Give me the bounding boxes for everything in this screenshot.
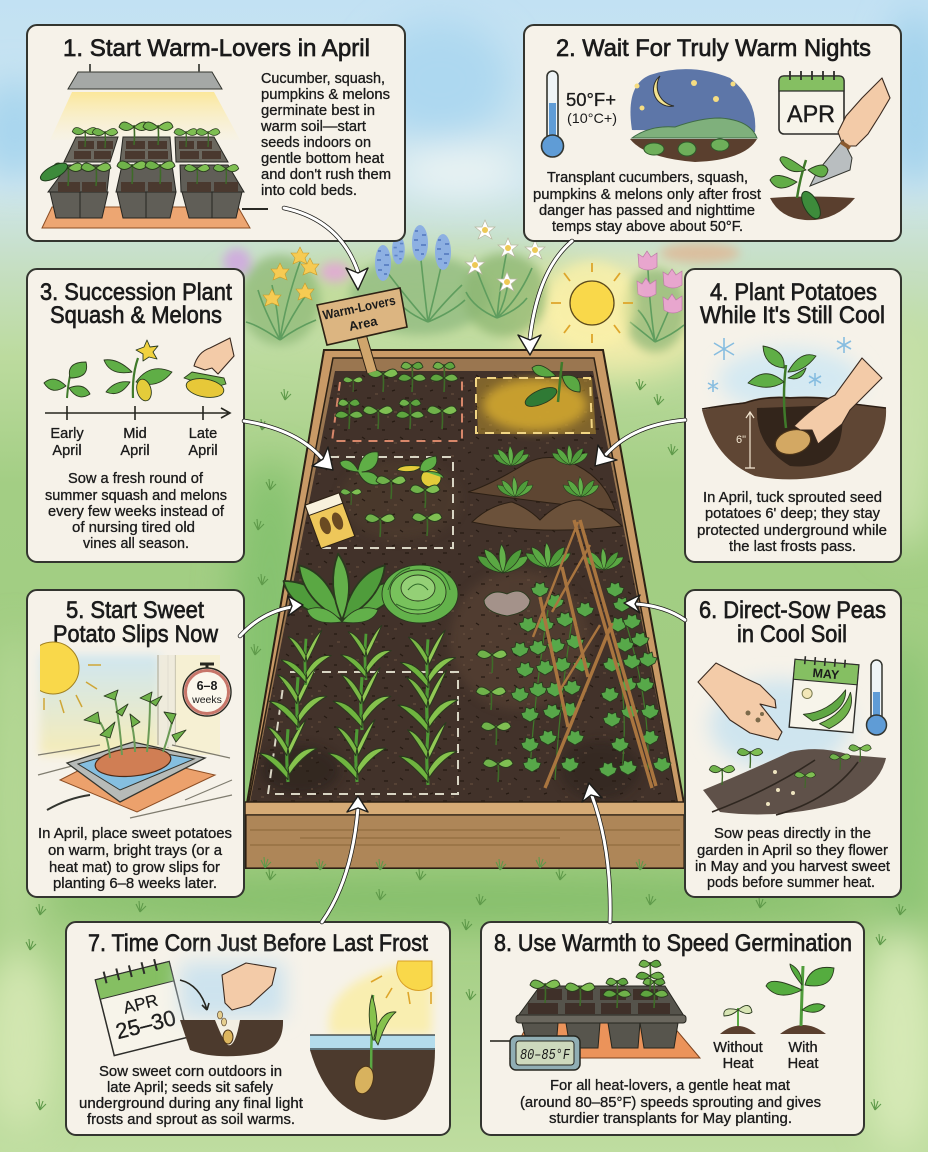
- arrow 1: panel 1 to warm-lovers area: [284, 208, 368, 290]
- body text 8: sturdier transplants for May planting.: [549, 1111, 792, 1127]
- heading 5: [53, 597, 218, 648]
- body text 6: [695, 826, 890, 891]
- icon: calendar Apr 25-30: APR: [121, 991, 160, 1018]
- sign: warm-lovers area: Warm-Lovers: [321, 293, 397, 323]
- icon: May calendar: MAY: [812, 666, 840, 682]
- heading 7: 7. Time Corn Just Before Last Frost: [88, 930, 428, 957]
- panel 6: direct-sow peas: [685, 590, 901, 897]
- illustration: sowing corn into soil: [180, 962, 285, 1056]
- arrow 2: panel 2 to warm bed corner: [518, 241, 572, 355]
- body text 7: late April; seeds sit safely: [107, 1080, 274, 1096]
- timeline labels: April: [188, 443, 218, 459]
- comparison labels: With: [788, 1040, 818, 1056]
- body text 5: In April, place sweet potatoes: [38, 826, 232, 842]
- late April squash in hand: [194, 338, 234, 374]
- sprout without heat: [720, 1005, 756, 1034]
- timeline labels: April: [120, 443, 150, 459]
- grow light: [50, 64, 240, 140]
- mid April plant: [133, 358, 138, 398]
- sign: warm-lovers area: [317, 288, 407, 372]
- body text 1: germinate best in: [261, 103, 375, 119]
- panel 4: plant potatoes: [685, 269, 901, 562]
- body text 8: [520, 1078, 821, 1127]
- digital thermometer: 80–85°F: [520, 1047, 571, 1064]
- body text 8: (around 80–85°F) speeds sprouting and gives: [520, 1095, 821, 1111]
- grass tufts: [26, 379, 906, 1110]
- illustration: planting a seed potato: [702, 346, 886, 479]
- body text 3: of nursing tired old: [72, 520, 195, 536]
- icon: thermometer: [866, 660, 886, 735]
- illustration: soil rows with sprouts: [703, 745, 886, 815]
- heading 2: 2. Wait For Truly Warm Nights: [556, 35, 871, 62]
- arrow 5: panel 5 to greens: [240, 596, 303, 636]
- illustration: hand dropping seeds: [698, 663, 782, 740]
- seedling trays: [38, 122, 244, 218]
- panel 5: start sweet potato slips: [27, 590, 244, 897]
- icon: timer 6-8 weeks: [183, 664, 231, 716]
- heading 6: in Cool Soil: [737, 621, 847, 648]
- temperature label: (10°C+): [567, 110, 617, 126]
- body text 2: pumpkins & melons only after frost: [533, 187, 761, 203]
- zone: succession squash and melons: [340, 452, 444, 537]
- timeline labels: April: [52, 443, 82, 459]
- zone: leafy greens: [284, 542, 624, 623]
- body text 1: and don't rush them: [261, 167, 391, 183]
- raised garden bed: [245, 350, 686, 870]
- dashed planting zones: [268, 378, 592, 794]
- comparison labels: [713, 1040, 818, 1072]
- panel 8: warmth for germination: [481, 922, 864, 1135]
- body text 3: vines all season.: [83, 536, 189, 552]
- arrow 8: panel 8 to trellis: [582, 783, 610, 922]
- illustration: window with sweet potato tray: [27, 642, 232, 818]
- comparison labels: Heat: [788, 1056, 818, 1072]
- body text 2: temps stay above about 50°F.: [552, 219, 743, 235]
- body text 8: For all heat-lovers, a gentle heat mat: [550, 1078, 790, 1094]
- icon: April calendar: APR: [787, 101, 835, 128]
- temperature label: 50°F+: [566, 89, 616, 110]
- sun over the bed: [548, 261, 636, 349]
- body text 2: danger has passed and nighttime: [539, 203, 755, 219]
- icon: May calendar: [789, 655, 859, 733]
- body text 1: [260, 71, 391, 199]
- body text 6: garden in April so they flower: [697, 843, 888, 859]
- icon: April calendar: [779, 71, 844, 134]
- zone: small pea seedlings: [476, 650, 513, 782]
- body text 5: planting 6–8 weeks later.: [53, 876, 217, 892]
- sky haze: [710, 680, 850, 770]
- body text 1: seeds indoors on: [261, 135, 371, 151]
- comparison labels: Without: [713, 1040, 763, 1056]
- arrow 3: panel 3 to squash zone: [244, 421, 333, 470]
- night scene: [630, 69, 757, 162]
- body text 6: Sow peas directly in the: [714, 826, 871, 842]
- body text 1: gentle bottom heat: [261, 151, 384, 167]
- heading 4: [700, 279, 885, 329]
- body text 6: pods before summer heat.: [707, 875, 875, 891]
- body text 4: In April, tuck sprouted seed: [703, 490, 882, 506]
- body text 3: every few weeks instead of: [48, 504, 225, 520]
- heading 6: [699, 597, 886, 648]
- heat mat: [510, 1020, 700, 1058]
- illustration: hand with trowel and plant: [770, 78, 890, 222]
- body text 6: in May and you harvest sweet: [695, 859, 890, 875]
- body text 5: on warm, bright trays (or a: [48, 843, 223, 859]
- body text 2: [533, 170, 761, 235]
- icon: timer 6-8 weeks: 6–8: [197, 679, 217, 693]
- arrow 7: panel 7 to corn: [322, 796, 368, 922]
- body text 4: protected underground while: [697, 523, 887, 539]
- heading 5: 5. Start Sweet: [66, 597, 204, 624]
- body text 3: summer squash and melons: [45, 488, 227, 504]
- timeline labels: Mid: [123, 426, 147, 442]
- body text 7: [79, 1064, 303, 1128]
- body text 3: Sow a fresh round of: [68, 471, 204, 487]
- zone: potato mounds: [468, 445, 622, 530]
- body text 7: Sow sweet corn outdoors in: [99, 1064, 282, 1080]
- timeline labels: [50, 426, 218, 459]
- icon: calendar Apr 25-30: 25–30: [113, 1005, 178, 1044]
- heading 4: While It's Still Cool: [700, 302, 885, 329]
- illustration: sun and sprouting corn: [310, 961, 435, 1120]
- early April plant: [67, 376, 70, 398]
- seedling tray: [516, 960, 686, 1048]
- panel 7: time corn: [66, 922, 450, 1135]
- sprout with heat: [766, 964, 834, 1034]
- illustration: planting a seed potato: 6": [736, 434, 746, 446]
- zone: warm-lovers seedlings: [335, 362, 458, 429]
- body text 7: underground during any final light: [79, 1096, 303, 1112]
- icon: timer 6-8 weeks: weeks: [191, 694, 222, 706]
- zone: transplanted cucumber: [523, 362, 580, 410]
- flower garden: [223, 220, 740, 352]
- heading 3: 3. Succession Plant: [40, 279, 232, 306]
- heading 5: Potato Slips Now: [53, 621, 218, 648]
- body text 7: frosts and sprout as soil warms.: [87, 1112, 295, 1128]
- zone: pea trellis with vines: [511, 520, 671, 788]
- body text 1: pumpkins & melons: [261, 87, 390, 103]
- heading 1: 1. Start Warm-Lovers in April: [63, 35, 370, 62]
- heading 3: Squash & Melons: [50, 302, 222, 329]
- body text 3: [45, 471, 227, 552]
- arrow 4: panel 4 to potato mounds: [595, 420, 685, 466]
- body text 1: warm soil—start: [260, 119, 366, 135]
- timeline labels: Early: [50, 426, 84, 442]
- icon: thermometer: [542, 71, 564, 157]
- panel 1: start warm-lovers in April: [27, 25, 405, 241]
- panel 2: wait for truly warm nights: [524, 25, 901, 241]
- body text 2: Transplant cucumbers, squash,: [547, 170, 748, 186]
- heading 4: 4. Plant Potatoes: [710, 279, 877, 306]
- power cord: [242, 208, 268, 210]
- icon: calendar Apr 25-30: [94, 956, 188, 1056]
- comparison labels: Heat: [723, 1056, 753, 1072]
- arrow 6: panel 6 to peas: [624, 595, 685, 620]
- body text 5: heat mat) to grow slips for: [49, 860, 220, 876]
- icon: seed packet: [305, 493, 355, 548]
- body text 5: [38, 826, 232, 892]
- timeline: [44, 338, 234, 420]
- temperature label: [566, 89, 617, 126]
- heading 3: [40, 279, 232, 329]
- icons: snowflakes: [708, 337, 862, 412]
- body text 4: [697, 490, 887, 555]
- heat mat: [42, 207, 250, 228]
- digital thermometer: [490, 1036, 580, 1070]
- zone: corn rows: [259, 625, 458, 785]
- panel 3: succession plant: [27, 269, 244, 562]
- body text 4: the last frosts pass.: [729, 539, 856, 555]
- body text 1: Cucumber, squash,: [261, 71, 385, 87]
- heading 6: 6. Direct-Sow Peas: [699, 597, 886, 624]
- timeline labels: Late: [189, 426, 217, 442]
- body text 4: potatoes 6' deep; they stay: [705, 506, 881, 522]
- sign: warm-lovers area: Area: [347, 313, 380, 334]
- body text 1: into cold beds.: [261, 183, 357, 199]
- heading 8: 8. Use Warmth to Speed Germination: [494, 930, 852, 957]
